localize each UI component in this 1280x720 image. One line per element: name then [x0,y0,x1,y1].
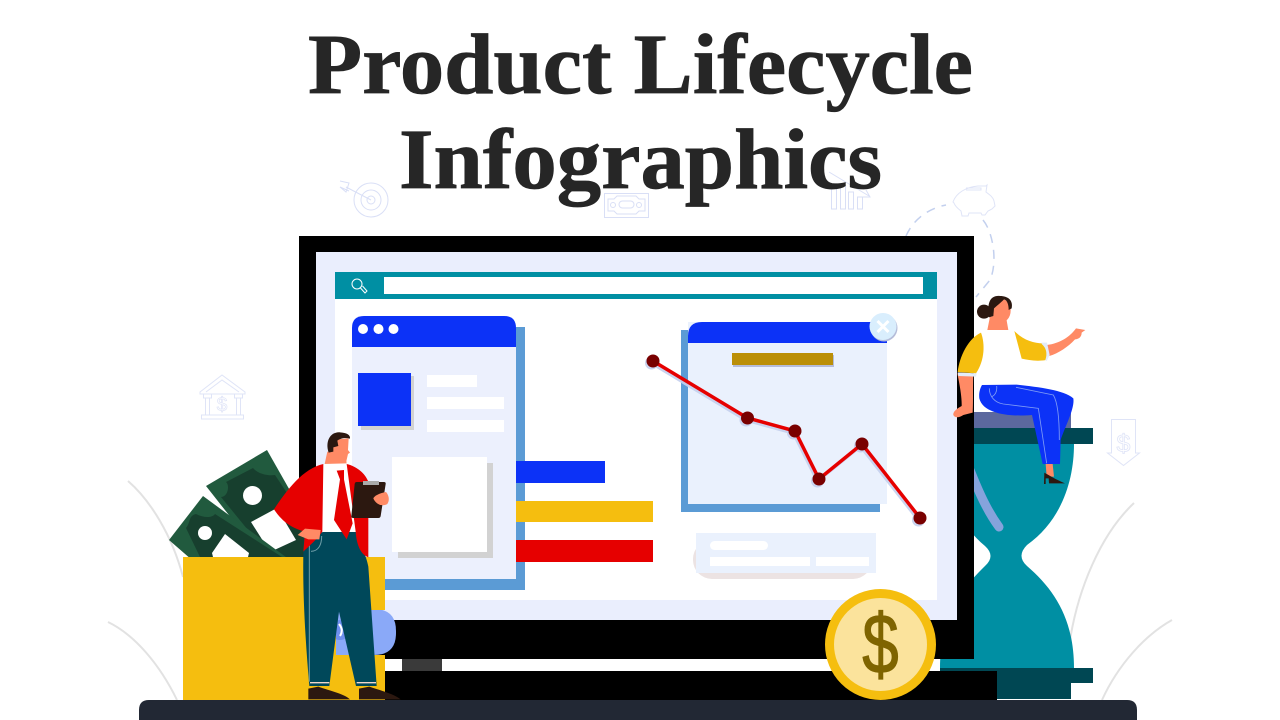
gold bar [732,353,833,365]
woman left arm [953,373,973,417]
icon: magnifier [352,279,367,293]
search bar [335,272,937,299]
popup back panel [681,330,880,512]
popup header [688,322,887,343]
close button [870,313,898,342]
blue bar [516,461,605,483]
woman hair [988,296,1012,317]
window body [352,316,516,579]
title line 2: Infographics [399,111,882,207]
clipboard [351,482,386,518]
man hand [373,492,389,505]
hourglass body [940,444,1074,668]
line chart [645,354,926,526]
card line 1 [710,557,810,566]
man pants [303,532,377,686]
man jacket left [274,464,323,552]
window header [352,316,516,347]
icon: bar chart [829,172,870,209]
man hair [327,432,350,453]
right popup window [681,313,898,512]
bill back [206,450,305,557]
gold bar shadow [733,355,834,367]
yellow box [183,557,385,700]
icon: dollar down arrow [1108,420,1140,466]
window back panel [385,327,525,590]
bottom card [693,533,876,579]
popup body [688,322,887,504]
hourglass highlight [970,470,999,527]
man shoes [308,687,401,699]
content block [392,457,487,552]
man with clipboard [274,432,401,699]
window dots [358,324,398,334]
floor [139,700,1137,720]
woman top [973,330,1022,387]
woman pointing [953,296,1085,484]
icon: target with arrow [340,181,388,217]
woman ankle [1046,464,1054,477]
text lines [427,375,504,432]
title line 1: Product Lifecycle [308,16,973,112]
card body [696,533,876,573]
man head [329,438,350,463]
man neck [325,452,347,470]
card line 2 [816,557,869,566]
horizontal bars [516,461,653,562]
card shadow [693,540,872,579]
line [653,361,920,518]
monitor screen frame [316,252,957,620]
hourglass bottom plate [925,668,1093,699]
content block shadow [398,463,493,558]
hourglass [925,412,1093,699]
woman sleeve right [1014,331,1048,361]
monitor [299,236,997,700]
icon: bank building: $ [217,395,228,416]
coin [825,589,936,700]
woman neck [987,317,1008,330]
monitor stand strip [385,659,940,671]
woman right arm [1047,328,1085,356]
red bar [516,540,653,562]
screen content area [335,272,937,600]
data points [646,354,926,524]
monitor bezel [299,236,974,659]
money bills [169,450,305,560]
background plant curves [108,481,1172,700]
woman sleeve left [958,333,984,373]
image placeholder shadow [361,376,414,430]
image placeholder [358,373,411,426]
search input [384,277,923,294]
icon: piggy bank [953,185,995,216]
man shirt [322,463,356,533]
coin: $ [862,597,899,691]
stand button [402,659,442,671]
card pill [710,541,768,550]
woman head [991,299,1011,323]
title [308,16,973,207]
yellow bar [516,501,653,522]
search bar background [335,272,937,299]
blue wallet tab [320,609,396,655]
line shadow [645,356,925,526]
man jacket right [347,464,368,557]
left browser window [352,316,525,590]
icon: bank building [200,375,245,419]
man hand on hip [298,529,321,539]
bill front [169,496,290,560]
dashed arc [906,205,994,297]
woman shoe [1044,473,1065,484]
hourglass top plate [960,428,1093,444]
man tie [334,470,353,539]
icon: dollar down arrow: $ [1117,430,1131,458]
icon: banknote [604,194,648,218]
monitor base [385,671,997,700]
woman trousers [979,385,1074,464]
wallet clasp [330,620,350,640]
seat cushion [960,412,1071,428]
